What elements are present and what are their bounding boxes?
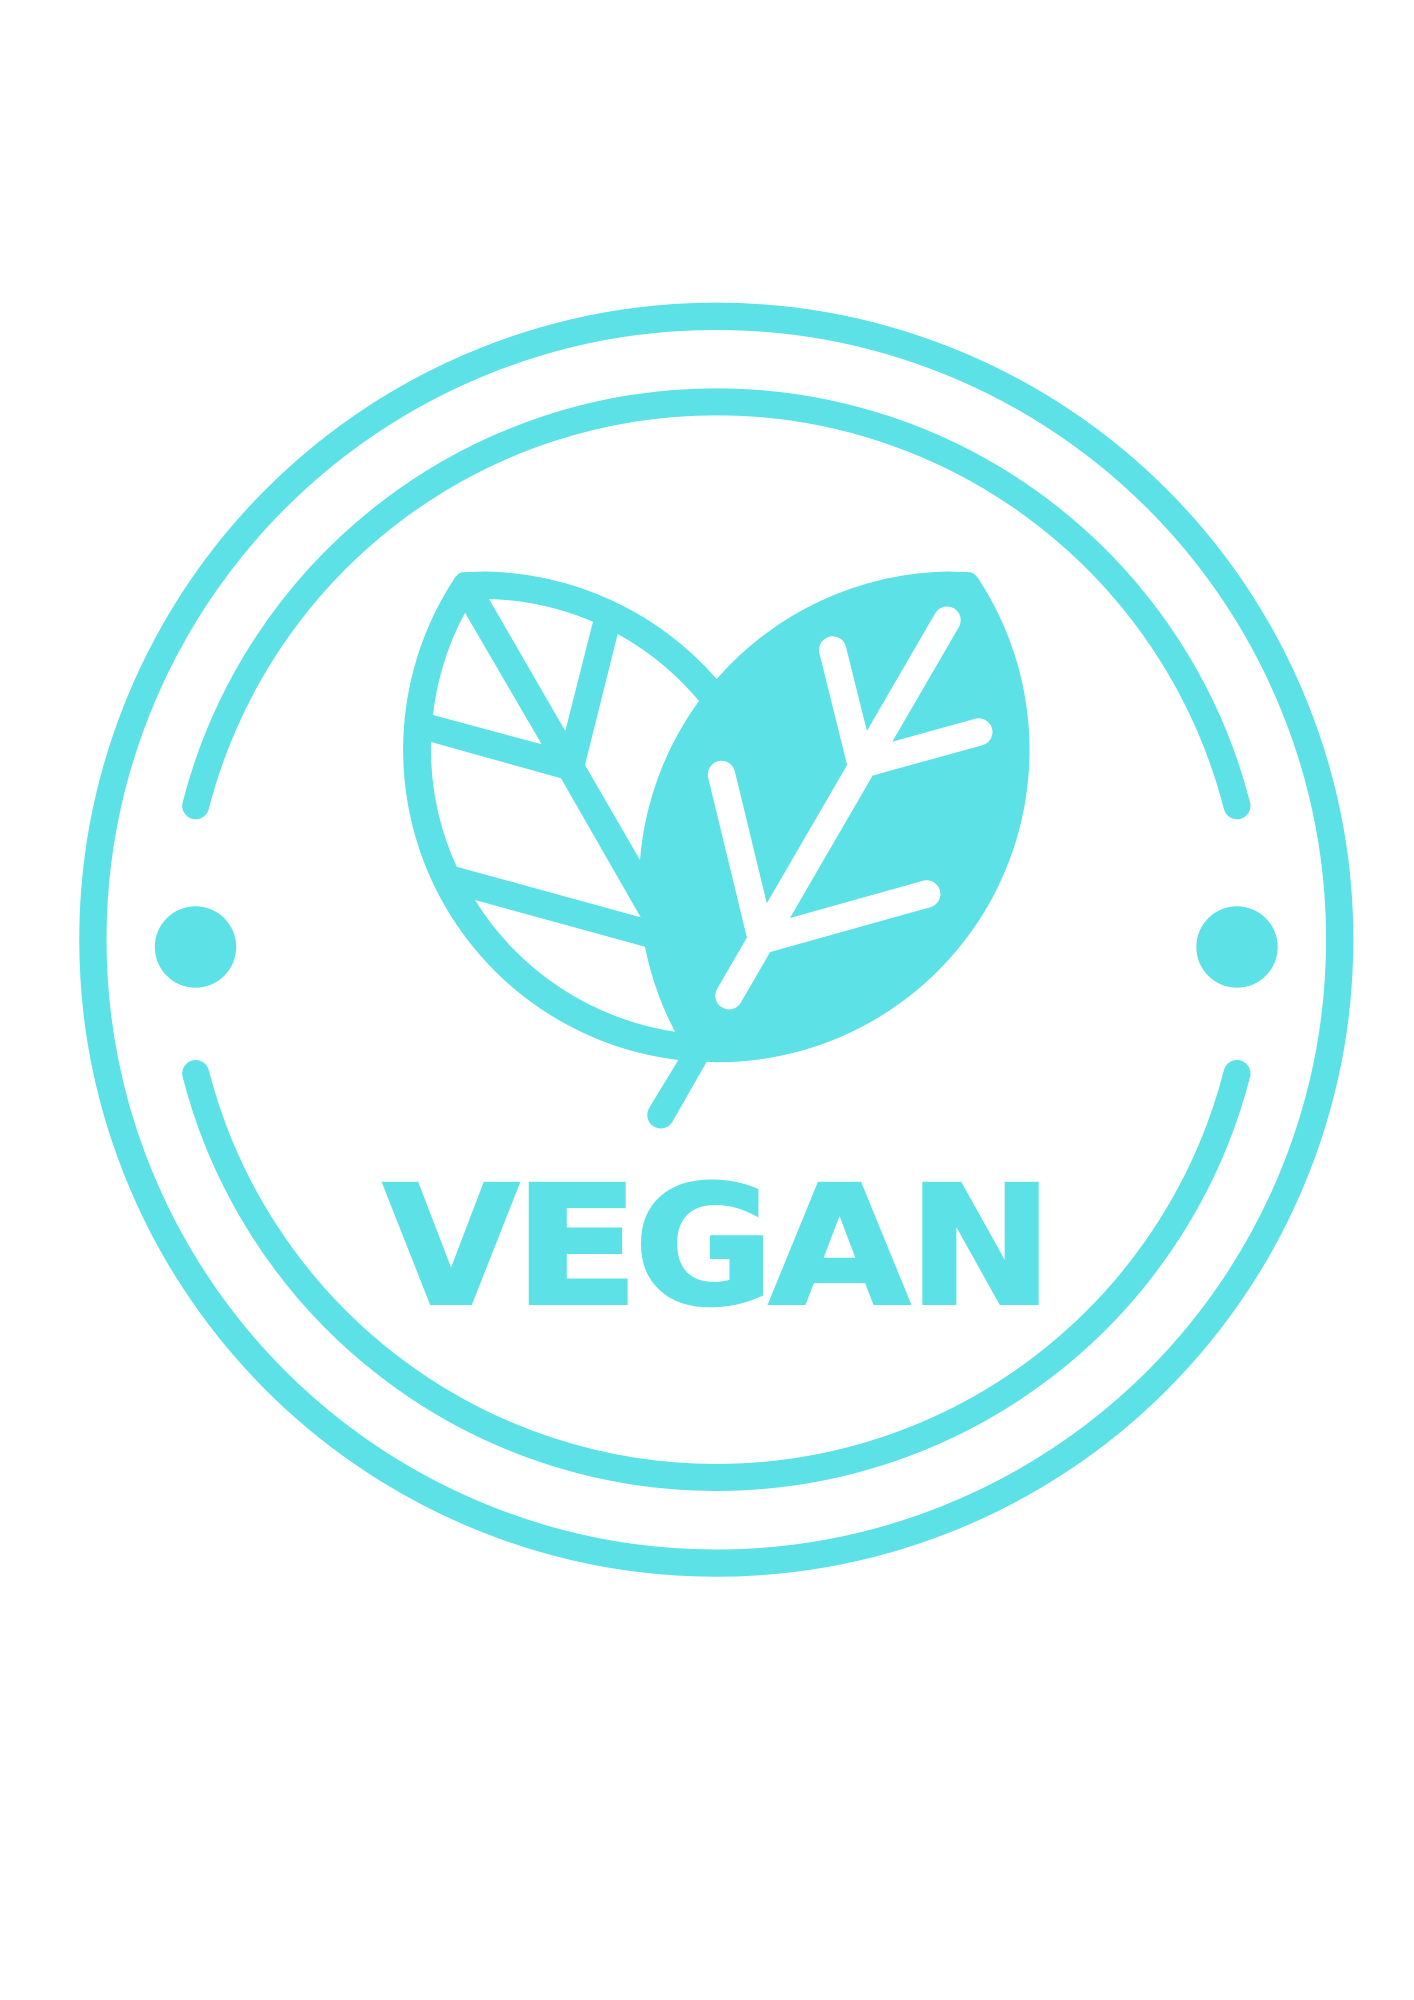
right dot — [1196, 906, 1278, 988]
title: VEGAN: N — [908, 1150, 1053, 1342]
outer ring — [93, 316, 1340, 1563]
lower left branch — [722, 774, 760, 935]
title: VEGAN: V — [383, 1150, 519, 1342]
leaf silhouette with outlined left leaf — [403, 572, 1030, 1128]
upper left branch — [833, 650, 861, 764]
icon: two leaves — [403, 572, 1030, 1128]
title: VEGAN: A — [769, 1150, 910, 1342]
lower right branch — [760, 894, 927, 941]
main vein — [729, 620, 947, 996]
right leaf white veins — [722, 620, 979, 996]
title: VEGAN — [383, 1150, 1053, 1342]
upper right branch — [863, 732, 979, 764]
bottom inner arc — [196, 1074, 1237, 1477]
top inner arc — [196, 402, 1237, 806]
title: VEGAN: G — [634, 1150, 774, 1342]
left dot — [155, 906, 236, 988]
title: VEGAN: E — [514, 1150, 640, 1342]
